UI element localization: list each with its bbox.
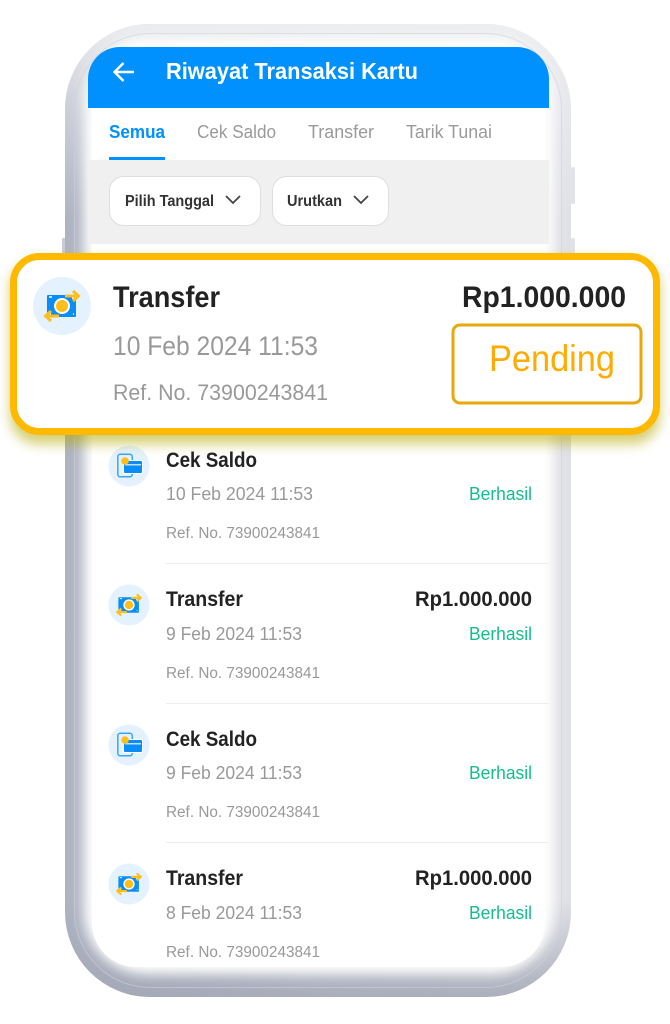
row: Cek Saldo 9 Feb: Berhasil <box>469 763 532 783</box>
dropdown: Pilih Tanggal <box>110 176 260 226</box>
row: Transfer 9 Feb <box>108 584 548 704</box>
status badge: Pending: Pending <box>489 338 615 379</box>
row: Cek Saldo 9 Feb: 9 Feb 2024 11:53 <box>166 762 302 783</box>
highlighted card: pending transfer: Transfer <box>113 281 220 314</box>
row: Transfer 9 Feb: Ref. No. 73900243841 <box>166 665 320 682</box>
row: Transfer 8 Feb: Rp1.000.000 <box>415 867 532 890</box>
icon: transfer <box>108 584 150 626</box>
row: Transfer 8 Feb: Berhasil <box>469 903 532 923</box>
row: Transfer 9 Feb: Rp1.000.000 <box>415 588 532 611</box>
filter tabs: Transfer <box>308 122 374 142</box>
row: Transfer 8 Feb: Transfer <box>166 867 243 890</box>
row: Cek Saldo 9 Feb: Cek Saldo <box>166 728 257 751</box>
row: Transfer 8 Feb: 8 Feb 2024 11:53 <box>166 902 302 923</box>
filter tabs <box>109 122 492 160</box>
row: Cek Saldo 10 Feb: Cek Saldo <box>166 449 257 472</box>
status badge: Pending <box>453 325 641 403</box>
row: Cek Saldo 9 Feb: Ref. No. 73900243841 <box>166 804 320 821</box>
icon: cek saldo <box>108 446 150 486</box>
icon: back arrow <box>114 63 134 81</box>
dropdown: Pilih Tanggal: Pilih Tanggal <box>125 193 214 210</box>
row: Transfer 8 Feb: Ref. No. 73900243841 <box>166 944 320 961</box>
row: Cek Saldo 10 Feb: Berhasil <box>469 484 532 504</box>
highlighted card: pending transfer <box>10 256 660 444</box>
dropdown: Urutkan <box>272 176 388 226</box>
row: Cek Saldo 9 Feb <box>108 724 548 843</box>
highlighted card: pending transfer: Ref. No. 73900243841 <box>113 380 328 405</box>
highlighted card: pending transfer: Rp1.000.000 <box>462 281 626 314</box>
icon: transfer <box>108 863 150 905</box>
filter tabs: Tarik Tunai <box>406 122 492 142</box>
row: Transfer 9 Feb: Berhasil <box>469 624 532 644</box>
filter bar <box>88 160 549 244</box>
row: Cek Saldo 10 Feb <box>108 446 548 564</box>
phone frame <box>62 24 575 997</box>
row: Cek Saldo 10 Feb: 10 Feb 2024 11:53 <box>166 483 313 504</box>
row: Transfer 9 Feb: 9 Feb 2024 11:53 <box>166 623 302 644</box>
filter tabs: Semua <box>109 122 166 142</box>
app header bar <box>88 47 549 108</box>
row: Transfer 9 Feb: Transfer <box>166 588 243 611</box>
header title: Riwayat Transaksi Kartu <box>166 58 418 84</box>
row: Transfer 8 Feb <box>108 863 532 961</box>
filter tabs: Cek Saldo <box>197 122 276 142</box>
dropdown: Urutkan: Urutkan <box>287 193 342 210</box>
icon: cek saldo <box>108 724 150 766</box>
highlighted card: pending transfer: 10 Feb 2024 11:53 <box>113 331 318 361</box>
row: Cek Saldo 10 Feb: Ref. No. 73900243841 <box>166 525 320 542</box>
icon: transfer <box>33 277 91 335</box>
